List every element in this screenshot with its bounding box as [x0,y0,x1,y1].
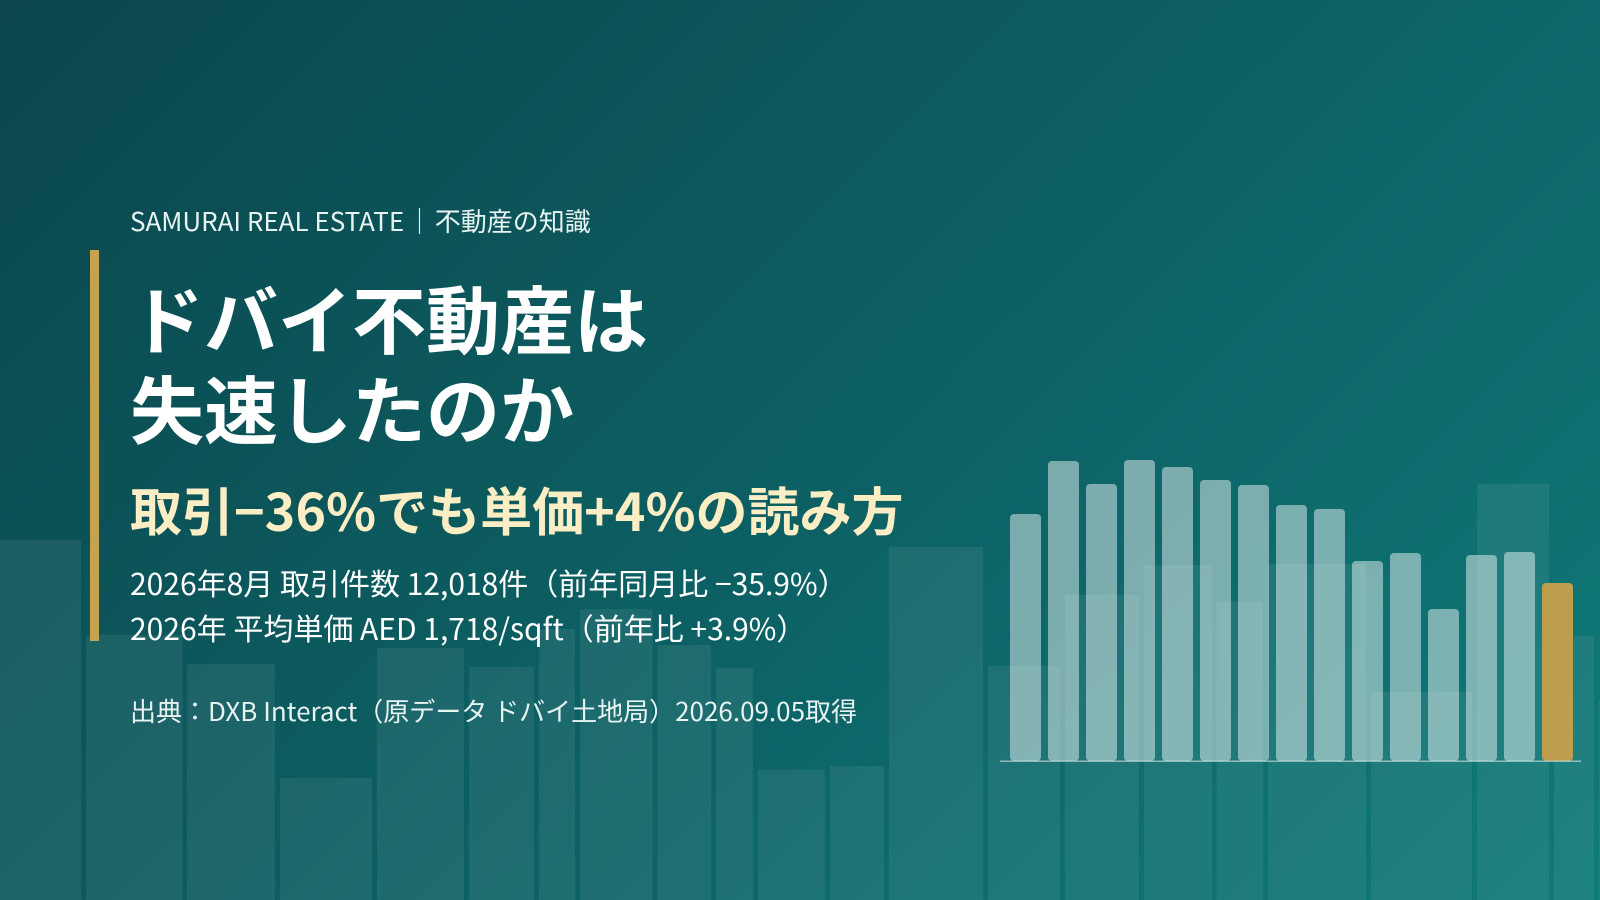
eyebrow: SAMURAI REAL ESTATE ｜ 不動産の知識 [130,202,591,239]
key figures: 2026年8月 取引件数 12,018件（前年同月比 −35.9%） [130,560,848,604]
key figures [130,560,848,649]
title: ドバイ不動産は [130,263,648,370]
title [130,263,648,460]
subtitle: 取引−36%でも単価+4%の読み方 [130,471,904,546]
source: 出典：DXB Interact（原データ ドバイ土地局）2026.09.05取得 [130,692,857,729]
title: 失速したのか [130,353,574,460]
key figures: 2026年 平均単価 AED 1,718/sqft（前年比 +3.9%） [130,605,806,649]
gold accent bar [90,250,99,641]
